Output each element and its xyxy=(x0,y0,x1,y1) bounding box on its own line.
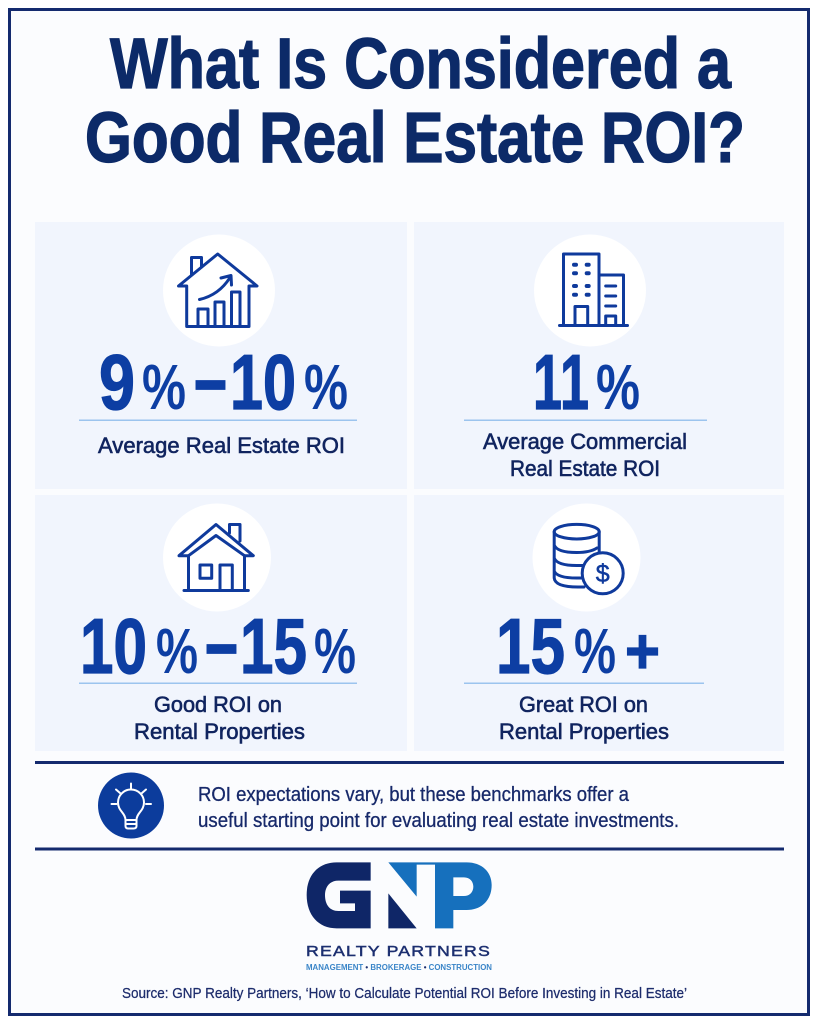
label: Rental Properties xyxy=(499,719,669,744)
label: Real Estate ROI xyxy=(510,456,660,481)
tagline: MANAGEMENT • BROKERAGE • CONSTRUCTION xyxy=(306,963,492,972)
stat: 11%: 1 xyxy=(533,338,562,426)
stat: 15%+ xyxy=(496,602,660,690)
logo mark xyxy=(307,862,492,928)
icon circle xyxy=(534,234,646,346)
stat: 15%+: + xyxy=(625,615,660,687)
divider xyxy=(464,420,707,421)
divider xyxy=(79,682,357,684)
panel background xyxy=(35,495,407,751)
stat: 9%–10%: 10 xyxy=(230,338,296,426)
divider xyxy=(464,682,704,684)
stat: 9%–10%: % xyxy=(142,351,186,423)
stat: 10%–15%: 10 xyxy=(80,602,147,690)
stat: 10%–15%: % xyxy=(156,615,198,687)
icon circle xyxy=(532,504,640,612)
stat: 15%+: 15 xyxy=(496,602,565,690)
stat: 11%: 1 xyxy=(560,338,589,426)
icon: office buildings xyxy=(560,254,628,326)
stat: 9%–10%: – xyxy=(194,329,227,429)
callout: ROI benchmarks note xyxy=(35,761,784,850)
panel: average real estate ROI xyxy=(35,222,407,489)
stat: 10%–15%: % xyxy=(314,615,356,687)
label: Great ROI on xyxy=(519,692,648,717)
panel: great ROI on rental properties xyxy=(414,495,784,751)
stat: 9%–10%: 9 xyxy=(99,338,135,426)
stat: 10%–15%: 15 xyxy=(240,602,307,690)
panel background xyxy=(414,495,784,751)
panel background xyxy=(35,222,407,489)
label xyxy=(499,692,669,744)
icon: coin stack with dollar xyxy=(554,524,623,594)
panel: good ROI on rental properties xyxy=(35,495,407,751)
callout text xyxy=(198,784,679,832)
logo: GNP Realty Partners xyxy=(306,862,492,972)
stat: 10%–15% xyxy=(80,593,356,693)
label: Rental Properties xyxy=(134,719,305,744)
bottom rule xyxy=(35,848,784,850)
label: Good ROI on xyxy=(154,692,282,717)
label: Average Real Estate ROI xyxy=(98,433,345,458)
panel: average commercial real estate ROI xyxy=(414,222,784,489)
icon: dollar sign: $ xyxy=(596,560,610,588)
label: Average Commercial xyxy=(483,429,687,454)
icon: house with rising chart xyxy=(178,254,257,326)
title xyxy=(85,25,745,178)
title: What Is Considered a xyxy=(110,25,731,104)
company name: REALTY PARTNERS xyxy=(306,943,491,960)
icon circle xyxy=(163,234,275,346)
label xyxy=(134,692,305,744)
stat: 15%+: % xyxy=(574,615,616,687)
stat: 11% xyxy=(533,338,640,426)
stat: 9%–10% xyxy=(99,329,348,429)
stat: 11%: % xyxy=(596,351,640,423)
stat: 10%–15%: – xyxy=(205,593,238,693)
top rule xyxy=(35,761,784,764)
label xyxy=(483,429,687,481)
stat: 9%–10%: % xyxy=(304,351,348,423)
source line: Source: GNP Realty Partners, ‘How to Calculate Potential ROI Before Investing in Real Estate’ xyxy=(122,985,687,1002)
divider xyxy=(79,420,357,421)
panel background xyxy=(414,222,784,489)
icon circle xyxy=(163,504,271,612)
icon: house xyxy=(179,524,253,590)
icon: light bulb xyxy=(98,772,164,838)
callout text: ROI expectations vary, but these benchmarks offer a xyxy=(198,784,630,806)
callout text: useful starting point for evaluating real estate investments. xyxy=(198,810,679,832)
